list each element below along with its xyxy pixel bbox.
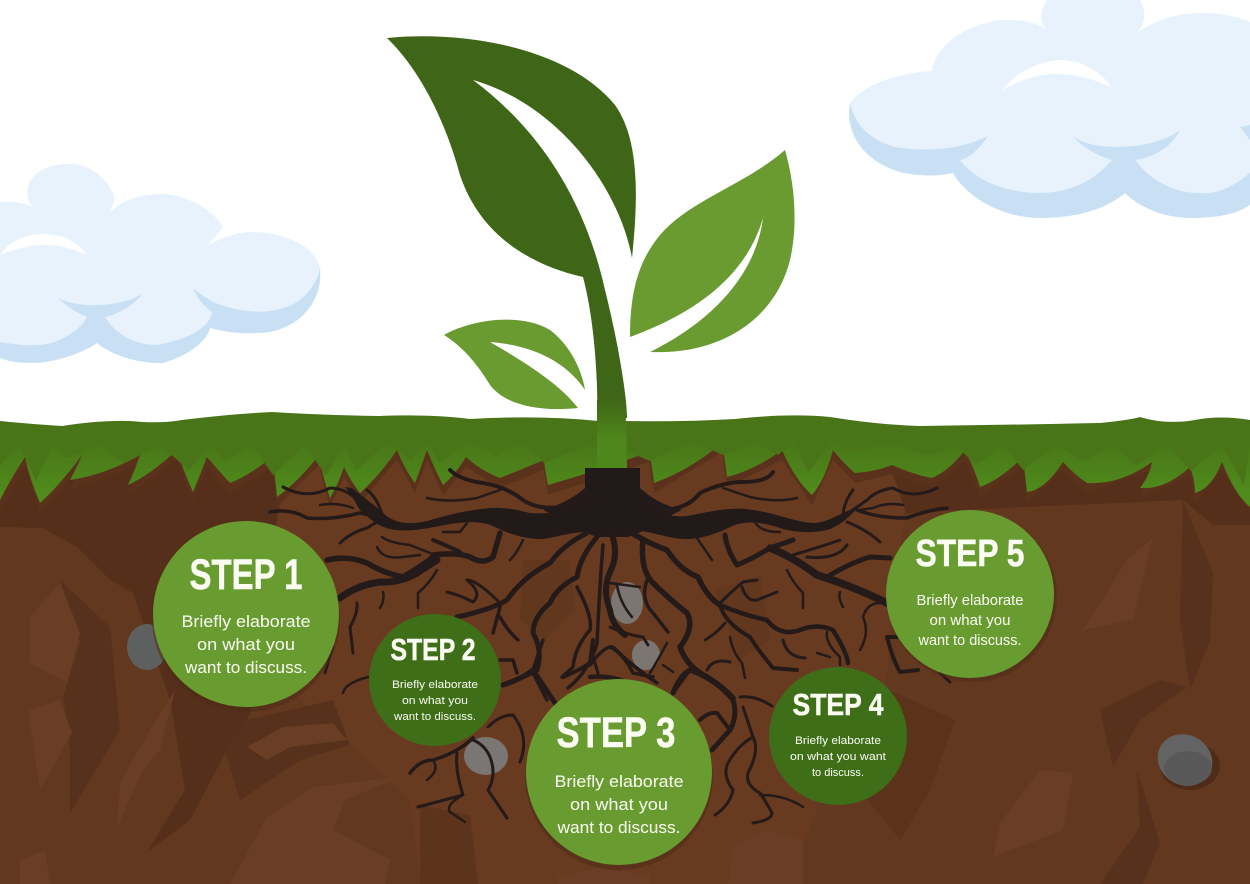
step 1: on what you <box>197 635 295 654</box>
step 3: Briefly elaborate <box>554 772 684 791</box>
lower left roots <box>410 640 657 822</box>
left upper branches <box>270 470 587 560</box>
grass dark blades <box>0 430 1250 485</box>
soil: darker patches <box>60 500 1213 884</box>
lower right roots <box>673 670 803 823</box>
cloud: top right <box>849 0 1250 218</box>
step 5: STEP 5 <box>916 533 1024 575</box>
roots <box>270 468 950 823</box>
step 1 <box>152 521 340 712</box>
grass fringe <box>0 412 1250 507</box>
step 1: Briefly elaborate <box>182 612 310 631</box>
right second tier roots <box>725 535 950 682</box>
step 4 <box>769 667 907 805</box>
soil: mid root zone <box>270 450 905 884</box>
step 3 <box>525 679 713 870</box>
right upper branches <box>643 472 947 560</box>
step 1: want to discuss. <box>184 658 307 677</box>
step 5: want to discuss. <box>918 633 1022 649</box>
soil: lighter patches <box>20 537 1153 884</box>
step 4: to discuss. <box>812 767 864 779</box>
rock: right <box>1148 724 1222 796</box>
step 2: on what you <box>402 695 468 707</box>
step 2: STEP 2 <box>390 632 476 667</box>
soil: dark upper layer <box>0 450 1250 852</box>
central roots <box>447 530 848 700</box>
step 5 <box>886 510 1057 682</box>
rock: center upper <box>611 582 643 624</box>
step 2: Briefly elaborate <box>392 679 478 691</box>
rock: behind step 1 <box>127 624 167 670</box>
step 5: Briefly elaborate <box>916 593 1024 609</box>
rocks <box>127 582 1222 796</box>
left second tier roots <box>325 533 500 693</box>
step 3: on what you <box>570 795 668 814</box>
big leaf and stem <box>387 36 636 418</box>
step 5: on what you <box>930 613 1010 629</box>
grass shadow on soil <box>0 440 1250 513</box>
rock: center lower <box>632 640 660 670</box>
root crown <box>543 468 682 537</box>
main root left <box>345 487 590 539</box>
step 4: on what you want <box>790 751 886 763</box>
soil ground <box>0 440 1250 884</box>
step 2: want to discuss. <box>393 711 476 723</box>
grass <box>0 412 1250 513</box>
right leaf <box>630 150 795 352</box>
step 3: STEP 3 <box>556 709 676 757</box>
step 1: STEP 1 <box>190 551 302 599</box>
step 3: want to discuss. <box>556 818 680 837</box>
main root right <box>630 495 857 539</box>
stem base <box>597 400 627 468</box>
plant <box>387 36 795 468</box>
small leaf <box>444 320 585 409</box>
step 2 <box>369 614 501 746</box>
cloud: left <box>0 164 320 363</box>
rock: lower left <box>464 737 508 775</box>
step 4: STEP 4 <box>792 687 884 722</box>
step 4: Briefly elaborate <box>795 735 881 747</box>
